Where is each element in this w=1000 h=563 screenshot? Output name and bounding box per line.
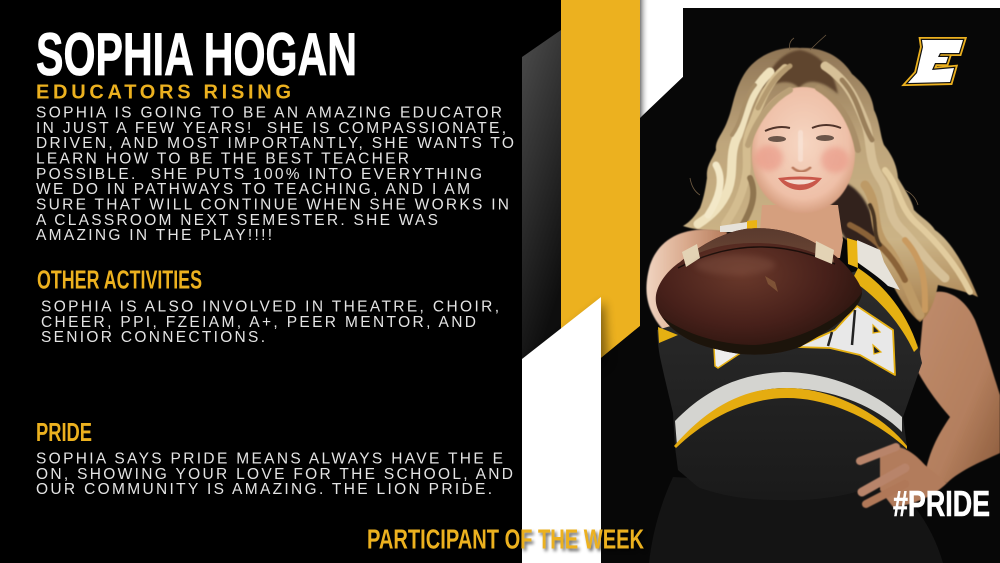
photo backdrop (601, 8, 1000, 563)
heading: pride: PRIDE (36, 417, 92, 447)
body text: about: WE DO IN PATHWAYS TO TEACHING, AND I AM (36, 181, 470, 198)
title: SOPHIA HOGAN (36, 21, 357, 88)
body text: other activities (41, 298, 499, 346)
dark angled stripe (522, 30, 561, 365)
stray hairs (690, 35, 918, 205)
participant of the week caption: PARTICIPANT OF THE WEEK (369, 526, 646, 557)
face (752, 87, 855, 213)
subtitle: EDUCATORS RISING (36, 82, 291, 104)
skirt (649, 477, 943, 563)
shadow behind neck (828, 180, 880, 262)
white top frame (640, 0, 1000, 118)
cheer top (657, 270, 922, 500)
gold vertical bar (561, 0, 640, 358)
body text: pride: OUR COMMUNITY IS AMAZING. THE LION PRIDE. (36, 481, 492, 498)
body text: other activities: CHEER, PPI, FZEIAM, A+, PEER MENTOR, AND (41, 314, 476, 331)
body text: other activities: SOPHIA IS ALSO INVOLVED IN THEATRE, CHOIR, (41, 298, 499, 316)
body text: about: POSSIBLE. SHE PUTS 100% INTO EVERYTHING (36, 166, 482, 183)
shadow beside gold bar (640, 0, 649, 118)
body text: about: SOPHIA IS GOING TO BE AN AMAZING EDUCATOR (36, 104, 502, 122)
participant of the week caption: PARTICIPANT OF THE WEEK (367, 524, 644, 554)
body text: pride (36, 450, 513, 498)
body text: pride: ON, SHOWING YOUR LOVE FOR THE SCHOOL, AND (36, 466, 513, 483)
body text: about: SURE THAT WILL CONTINUE WHEN SHE WORKS IN (36, 196, 509, 214)
heading: other activities: OTHER ACTIVITIES (37, 264, 202, 294)
neck (758, 205, 843, 258)
face details (755, 125, 849, 190)
left arm (646, 229, 727, 335)
body text: about: A CLASSROOM NEXT SEMESTER. SHE WAS (36, 212, 438, 229)
participant of the week caption (367, 524, 646, 557)
body text: about: AMAZING IN THE PLAY!!!! (36, 227, 272, 244)
white angled stripe (522, 297, 601, 563)
neckline trim (852, 268, 918, 352)
hand (860, 446, 947, 507)
body text: about: IN JUST A FEW YEARS! SHE IS COMPASSIONATE, (36, 120, 506, 137)
right strands (825, 66, 970, 315)
top strap gold left (747, 220, 757, 232)
body text: about: DRIVEN, AND MOST IMPORTANTLY, SHE WANTS TO (36, 135, 514, 152)
crown roots (762, 50, 838, 94)
lettering (714, 306, 895, 375)
white band (675, 372, 902, 446)
hair framing face (748, 88, 858, 150)
logo: E (908, 40, 963, 83)
shadow under white stripe (530, 302, 608, 420)
trim left (658, 327, 678, 343)
gold band (674, 388, 907, 449)
photo: cheerleader with football (646, 35, 1000, 563)
body text: about: LEARN HOW TO BE THE BEST TEACHER (36, 150, 409, 168)
top strap white right (857, 240, 900, 290)
body text: pride: SOPHIA SAYS PRIDE MEANS ALWAYS HAVE THE E (36, 450, 503, 468)
body text: other activities: SENIOR CONNECTIONS. (41, 329, 265, 346)
left strands (698, 66, 790, 226)
top strap gold right (847, 238, 858, 268)
right arm (918, 292, 1000, 483)
top strap white left (720, 222, 747, 232)
body text: about (36, 104, 514, 244)
hair (683, 35, 978, 322)
football (656, 228, 862, 355)
